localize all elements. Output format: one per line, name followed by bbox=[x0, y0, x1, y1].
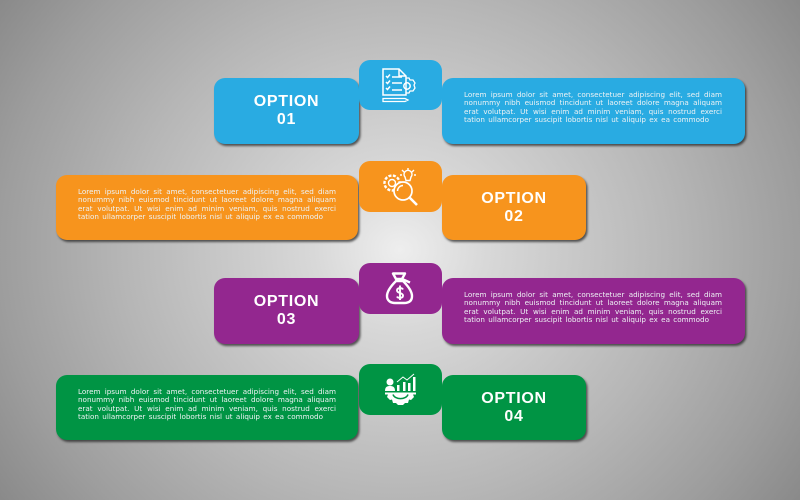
option 04 label panel bbox=[442, 375, 586, 440]
icon: person, growth chart and gear bbox=[385, 374, 416, 405]
option 04 icon tab bbox=[359, 364, 442, 415]
option 04 heading: 04 bbox=[504, 408, 524, 425]
option 01 heading: OPTION bbox=[254, 93, 319, 110]
option 01 text: Lorem ipsum dolor sit amet, consectetuer adipiscing elit, sed diam bbox=[464, 90, 722, 99]
option 02 text: nonummy nibh euismod tincidunt ut laoreet dolore magna aliquam bbox=[78, 195, 336, 204]
icon: checklist document with gear bbox=[382, 68, 416, 102]
icon: gear, magnifier and light bulb bbox=[383, 168, 418, 206]
option 04 description panel bbox=[56, 375, 358, 440]
option 02 text: erat volutpat. Ut wisi enim ad minim veniam, quis nostrud exerci bbox=[78, 204, 336, 213]
row 2: option 02 bbox=[56, 161, 589, 244]
option 04 text bbox=[78, 387, 336, 421]
option 01 heading bbox=[254, 93, 319, 128]
option 04 text: tation ullamcorper suscipit lobortis nisl ut aliquip ex ea commodo bbox=[78, 412, 323, 421]
option 03 text: nonummy nibh euismod tincidunt ut laoreet dolore magna aliquam bbox=[464, 298, 722, 307]
option 02 heading bbox=[481, 190, 547, 225]
option 04 heading: OPTION bbox=[481, 390, 547, 407]
option 02 description panel bbox=[56, 175, 358, 240]
option 01 text: tation ullamcorper suscipit lobortis nisl ut aliquip ex ea commodo bbox=[464, 115, 709, 124]
row 4: option 04 bbox=[56, 364, 589, 444]
option 02 icon tab bbox=[359, 161, 442, 212]
option 01 text: nonummy nibh euismod tincidunt ut laoreet dolore magna aliquam bbox=[464, 98, 722, 107]
option 01 heading: 01 bbox=[277, 111, 296, 128]
option 03 description panel bbox=[442, 278, 745, 344]
option 03 heading bbox=[254, 293, 319, 328]
option 04 heading bbox=[481, 390, 547, 425]
option 02 text: tation ullamcorper suscipit lobortis nisl ut aliquip ex ea commodo bbox=[78, 212, 323, 221]
option 02 text: Lorem ipsum dolor sit amet, consectetuer adipiscing elit, sed diam bbox=[78, 187, 336, 196]
option 03 heading: 03 bbox=[277, 311, 296, 328]
option 01 text: erat volutpat. Ut wisi enim ad minim veniam, quis nostrud exerci bbox=[464, 107, 722, 116]
option 03 heading: OPTION bbox=[254, 293, 319, 310]
option 01 icon tab bbox=[359, 60, 442, 110]
icon: money bag bbox=[386, 272, 414, 304]
option 03 text bbox=[464, 290, 722, 324]
option 04 text: nonummy nibh euismod tincidunt ut laoreet dolore magna aliquam bbox=[78, 395, 336, 404]
option 02 heading: OPTION bbox=[481, 190, 547, 207]
option 01 text bbox=[464, 90, 722, 124]
option 04 text: Lorem ipsum dolor sit amet, consectetuer adipiscing elit, sed diam bbox=[78, 387, 336, 396]
option 03 text: Lorem ipsum dolor sit amet, consectetuer adipiscing elit, sed diam bbox=[464, 290, 722, 299]
option 03 icon tab bbox=[359, 263, 442, 314]
option 03 label panel bbox=[214, 278, 359, 344]
option 03 text: tation ullamcorper suscipit lobortis nisl ut aliquip ex ea commodo bbox=[464, 315, 709, 324]
row 1: option 01 bbox=[214, 60, 748, 148]
option 02 heading: 02 bbox=[504, 208, 524, 225]
option 02 text bbox=[78, 187, 336, 221]
option 03 text: erat volutpat. Ut wisi enim ad minim veniam, quis nostrud exerci bbox=[464, 307, 722, 316]
option 02 label panel bbox=[442, 175, 586, 240]
option 01 label panel bbox=[214, 78, 359, 144]
option 04 text: erat volutpat. Ut wisi enim ad minim veniam, quis nostrud exerci bbox=[78, 404, 336, 413]
row 3: option 03 bbox=[214, 263, 748, 348]
option 01 description panel bbox=[442, 78, 745, 144]
